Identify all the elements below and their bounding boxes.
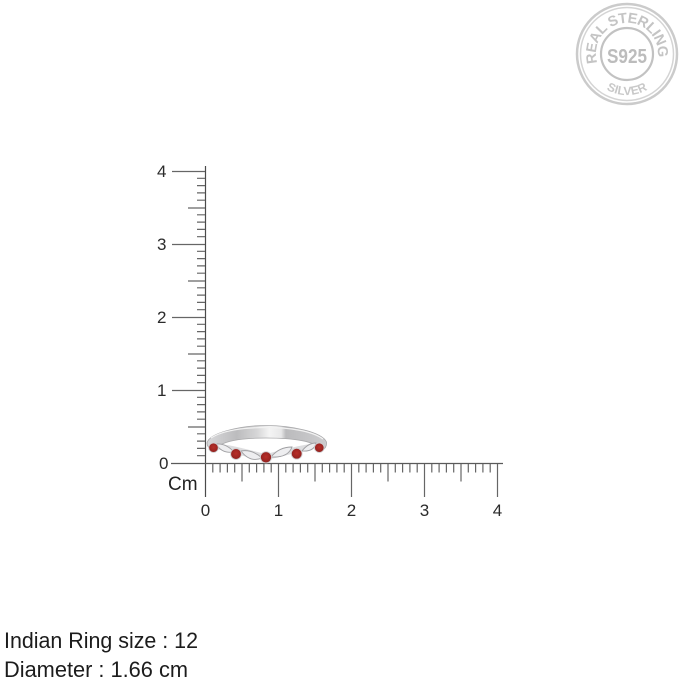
vertical ruler axis	[172, 166, 206, 497]
ring size text: Indian Ring size : 12	[4, 628, 198, 653]
vertical axis labels: 4	[157, 162, 166, 181]
badge text: silver: SILVER	[607, 83, 648, 96]
unit label: Cm: Cm	[168, 474, 198, 495]
horizontal axis labels: 2	[347, 501, 356, 520]
horizontal axis labels: 1	[274, 501, 283, 520]
horizontal axis labels: 0	[201, 501, 210, 520]
vertical axis labels	[157, 162, 168, 473]
badge: real sterling silver S925	[576, 2, 678, 106]
ring stones	[209, 443, 218, 453]
vertical axis labels: 3	[157, 235, 166, 254]
ring front leaves	[216, 443, 316, 459]
vertical axis labels: 2	[157, 308, 166, 327]
vertical axis labels: 1	[157, 381, 166, 400]
horizontal axis labels: 3	[420, 501, 429, 520]
vertical axis labels: 0	[159, 454, 168, 473]
horizontal axis labels: 4	[493, 501, 502, 520]
ring front band	[216, 443, 318, 460]
badge text: real sterling: REAL STERLING	[586, 12, 668, 64]
badge text: S925: S925	[607, 46, 647, 68]
horizontal ruler axis	[171, 464, 503, 497]
ring	[207, 426, 327, 463]
horizontal axis labels	[201, 501, 502, 520]
ring back band	[207, 426, 327, 450]
